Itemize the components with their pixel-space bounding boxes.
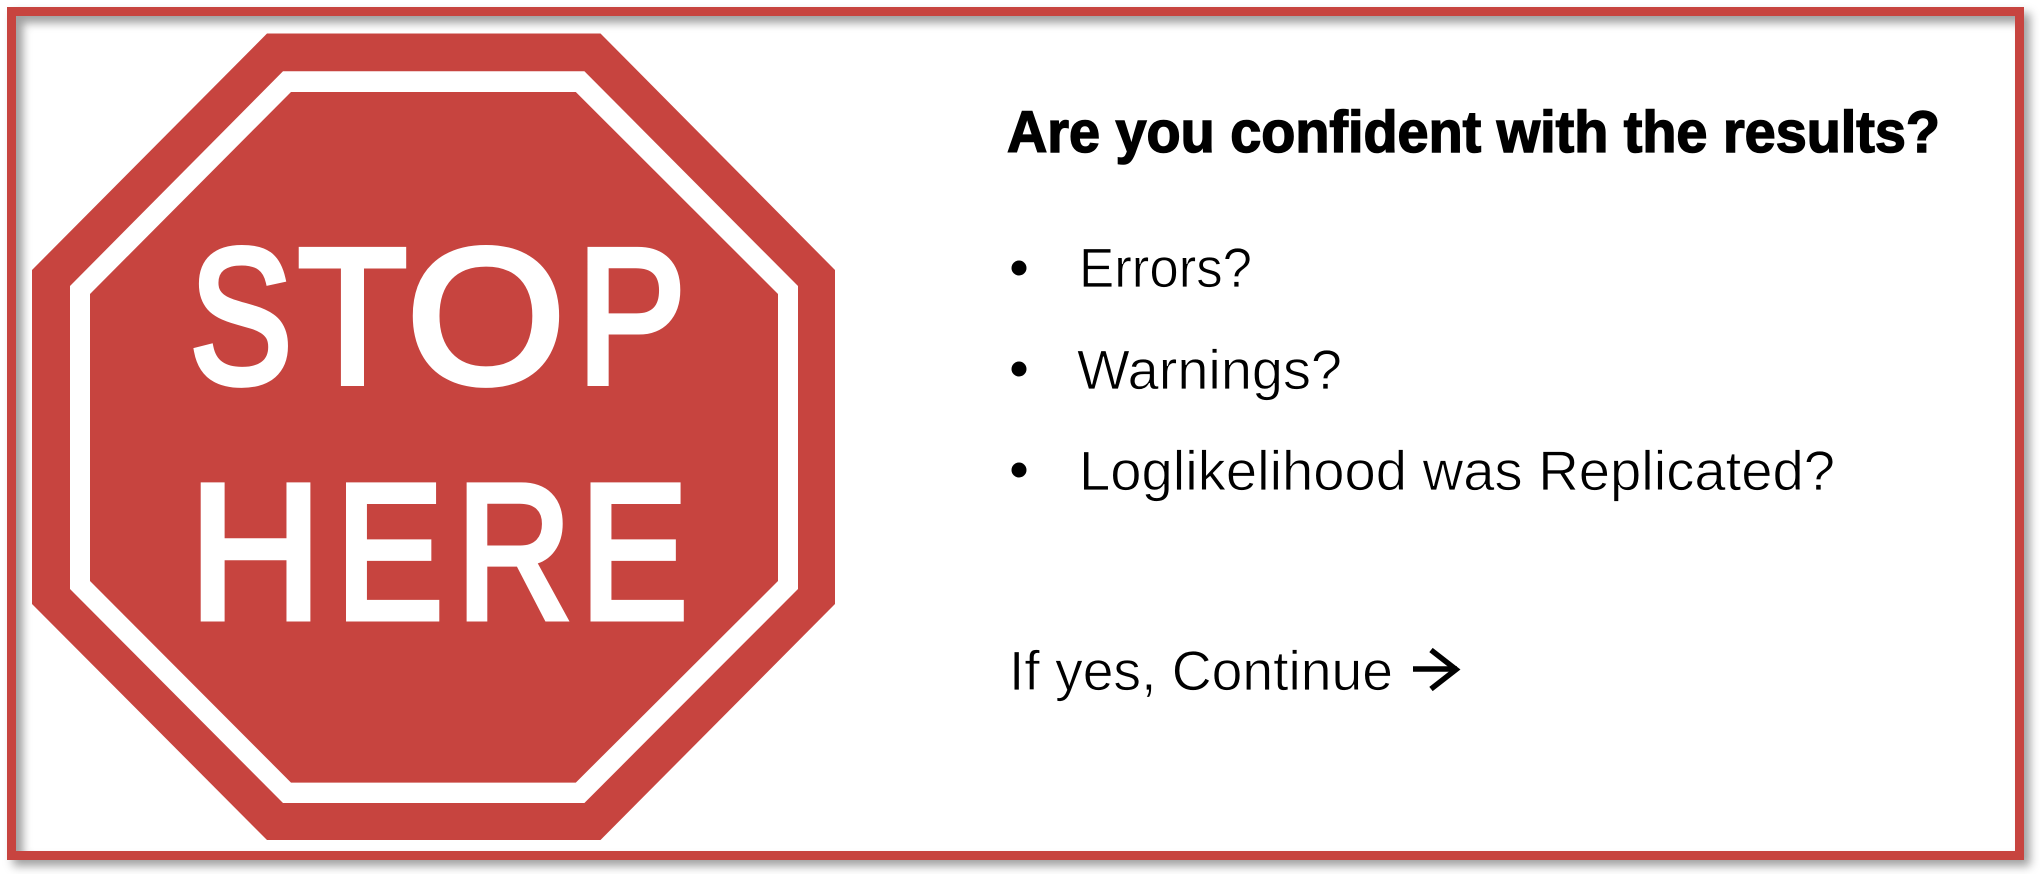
arrow: [1413, 650, 1457, 689]
icon: stop sign: [32, 34, 835, 840]
sign word: HERE: [189, 444, 688, 659]
sign word: HERE: R: [456, 445, 572, 659]
sign word: STOP: [190, 209, 686, 424]
heading: Are you confident with the results?: [1007, 100, 1940, 165]
sign word: HERE: H: [189, 445, 322, 659]
sign word: STOP: P: [577, 209, 686, 423]
sign word: HERE: E: [336, 444, 443, 659]
continue prompt: If yes, Continue: [1009, 639, 1393, 702]
bullet list: [1012, 236, 1835, 502]
sign word: HERE: E: [580, 444, 688, 659]
sign word: STOP: O: [407, 209, 565, 423]
bullet item: Loglikelihood: Loglikelihood was Replicated?: [1079, 439, 1835, 502]
bullet item: Errors: [1012, 236, 1252, 299]
sign word: STOP: T: [298, 210, 407, 424]
sign word: STOP: S: [190, 209, 292, 423]
bullet item: Warnings: Warnings?: [1077, 338, 1342, 401]
bullet item: Errors: Errors?: [1079, 236, 1252, 299]
